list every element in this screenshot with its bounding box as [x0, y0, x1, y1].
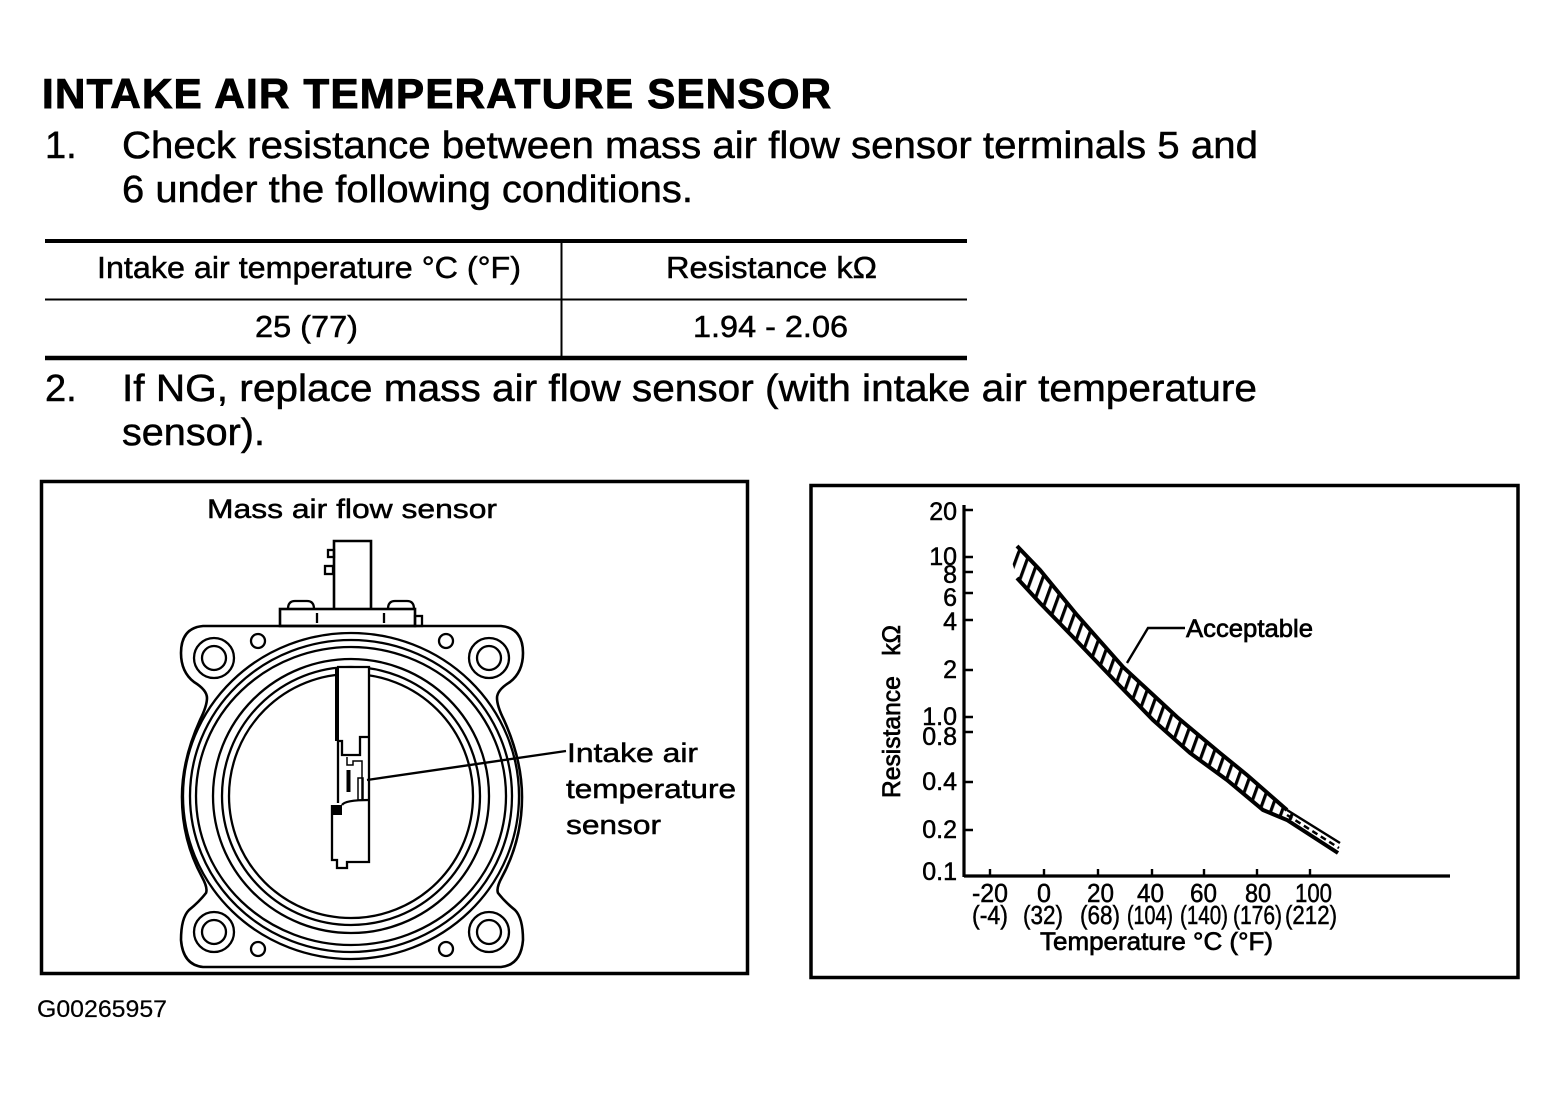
leader line	[367, 751, 566, 780]
step 2 text: If NG, replace mass air flow sensor (with intake air temperature	[122, 368, 1257, 410]
step 2 text: 2.	[45, 368, 77, 410]
resistance table: 1.94 - 2.06	[693, 309, 848, 344]
resistance table	[45, 241, 967, 358]
y axis labels: 20	[929, 498, 957, 526]
panel: resistance chart	[811, 486, 1518, 978]
callout: intake air temperature sensor: Intake air	[567, 738, 698, 768]
step 1 text: 1.	[45, 125, 77, 167]
panel heading: Mass air flow sensor	[207, 494, 497, 524]
x axis labels: (32)	[1023, 900, 1063, 930]
figure code: G00265957	[37, 996, 167, 1023]
step 1 text: Check resistance between mass air flow sensor terminals 5 and	[122, 125, 1258, 167]
icon: sensor drawing	[181, 541, 523, 967]
y axis labels: 0.1	[922, 858, 957, 886]
y axis labels: 2	[943, 656, 957, 684]
concentric bore rings	[183, 633, 519, 959]
callout: acceptable: Acceptable	[1186, 615, 1313, 643]
x axis labels: (176)	[1233, 900, 1282, 930]
panel: mass air flow sensor	[42, 482, 748, 974]
resistance table: 25 (77)	[255, 309, 358, 344]
resistance table: Resistance kΩ	[666, 250, 877, 285]
sensor probe	[332, 667, 369, 868]
y axis labels: 10	[929, 543, 957, 571]
bolt holes	[194, 634, 509, 956]
y axis labels: 8	[943, 561, 957, 589]
x axis labels: (212)	[1285, 900, 1337, 930]
x axis labels: -20	[972, 878, 1008, 908]
title: INTAKE AIR TEMPERATURE SENSOR	[42, 70, 831, 117]
step 2 text: sensor).	[122, 412, 265, 454]
connector housing	[280, 541, 422, 626]
step 1 text: 6 under the following conditions.	[122, 169, 693, 211]
x axis labels: (104)	[1127, 900, 1173, 930]
x axis labels: 0	[1037, 878, 1051, 908]
callout: intake air temperature sensor	[566, 738, 736, 840]
callout: intake air temperature sensor: temperature	[566, 774, 736, 804]
axes	[964, 505, 1450, 877]
y axis labels: 1.0	[922, 703, 957, 731]
y axis labels: 4	[943, 608, 957, 636]
x axis labels: (140)	[1180, 900, 1228, 930]
y axis labels: 0.2	[922, 816, 957, 844]
y axis labels: 0.8	[922, 723, 957, 751]
y axis labels	[922, 498, 957, 886]
step 2 text	[45, 368, 1257, 454]
flange outline	[181, 626, 523, 967]
step 1 text	[45, 125, 1258, 211]
resistance table: Intake air temperature °C (°F)	[97, 250, 521, 285]
x axis labels	[972, 878, 1337, 930]
x axis labels: 60	[1190, 878, 1217, 908]
callout: intake air temperature sensor: sensor	[566, 810, 661, 840]
x axis labels: 100	[1295, 878, 1332, 908]
y axis title: Resistance kΩ	[878, 625, 906, 798]
y axis labels: 6	[943, 584, 957, 612]
x axis labels: (-4)	[972, 900, 1008, 930]
x axis labels: 20	[1087, 878, 1114, 908]
x axis labels: (68)	[1080, 900, 1120, 930]
callout: acceptable	[1127, 615, 1313, 663]
y axis labels: 0.4	[922, 768, 957, 796]
x axis labels: 40	[1137, 878, 1164, 908]
acceptable band	[1012, 546, 1340, 853]
x axis labels: 80	[1245, 878, 1271, 908]
x axis title: Temperature °C (°F)	[1040, 928, 1273, 956]
